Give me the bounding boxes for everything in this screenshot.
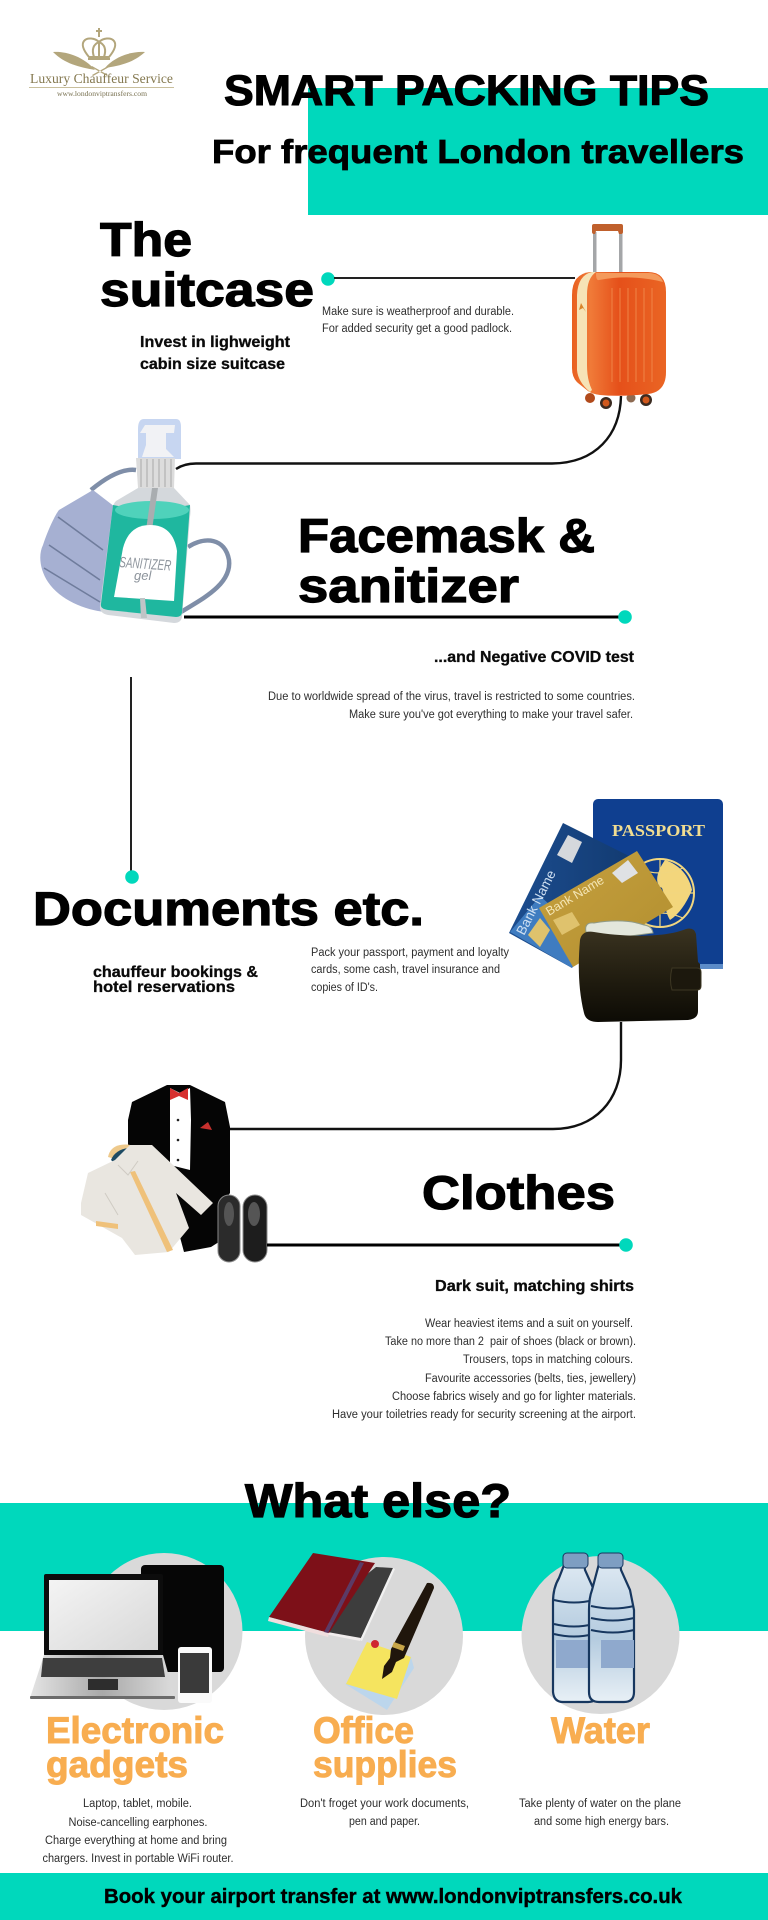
connector line and dot (184, 610, 632, 624)
suitcase subheading: cabin size suitcase (140, 356, 285, 373)
footer call to action: Book your airport transfer at www.londonviptransfers.co.uk (104, 1886, 683, 1908)
water description: Take plenty of water on the plane (519, 1798, 681, 1810)
suitcase description (322, 306, 514, 335)
suitcase subheading: Invest in lighweight (140, 334, 290, 351)
heading: Documents etc.: Documents etc. (33, 882, 424, 935)
gadgets description (42, 1798, 234, 1865)
icon: suit, shirt and shoes (81, 1085, 267, 1262)
facemask description (268, 691, 635, 721)
gadgets description: Noise-cancelling earphones. (68, 1817, 208, 1829)
clothes description (332, 1318, 636, 1421)
arrow: vertical connector to documents (125, 677, 139, 884)
heading: Electronic gadgets: Electronic (46, 1710, 224, 1751)
arrow: documents to clothes (230, 1022, 621, 1129)
arrow: suitcase to sanitizer (176, 396, 621, 469)
passport label: PASSPORT (612, 821, 706, 840)
connector dot and line (321, 272, 575, 286)
suitcase subheading (140, 334, 290, 373)
subtitle: For frequent London travellers (212, 133, 744, 170)
gadgets description: Charge everything at home and bring (45, 1835, 227, 1847)
documents subheading: chauffeur bookings & (93, 964, 258, 981)
suitcase description: Make sure is weatherproof and durable. (322, 306, 514, 318)
gadgets description: Laptop, tablet, mobile. (83, 1798, 192, 1810)
teal header block (308, 88, 768, 215)
logo: Luxury Chauffeur Service (29, 28, 174, 98)
heading: Clothes: Clothes (422, 1166, 615, 1219)
bottle label text: SANITIZER (119, 554, 172, 575)
heading: Office supplies: Office (313, 1710, 414, 1751)
gold card label: Bank Name (543, 873, 607, 919)
icon: laurel (53, 52, 145, 76)
heading: Facemask and sanitizer: Facemask & (298, 509, 595, 562)
icon: facemask and sanitizer bottle (40, 419, 229, 623)
documents description: cards, some cash, travel insurance and (311, 964, 500, 976)
clothes description: Trousers, tops in matching colours. (463, 1354, 633, 1366)
documents description: copies of ID's. (311, 982, 378, 994)
title: SMART PACKING TIPS (224, 67, 709, 115)
panel: water (519, 1553, 681, 1828)
panel: clothes (81, 1085, 636, 1421)
icon: crown (83, 28, 115, 59)
heading: Water: Water (551, 1710, 650, 1751)
connector line and dot (267, 1238, 633, 1252)
suitcase description: For added security get a good padlock. (322, 323, 512, 335)
panel: suitcase (100, 213, 666, 409)
icon: facemask and sanitizer bottle: gel (134, 568, 152, 583)
office description: pen and paper. (349, 1816, 420, 1828)
icon: suitcase (572, 224, 666, 409)
heading: The suitcase (100, 213, 314, 316)
facemask description: Make sure you've got everything to make your travel safer. (349, 709, 633, 721)
heading: Office supplies: supplies (313, 1744, 457, 1785)
water description (519, 1798, 681, 1828)
documents subheading (93, 964, 258, 996)
panel: documents (33, 799, 723, 1022)
icon: laptop, tablet and phone (30, 1553, 242, 1710)
panel: facemask and sanitizer (40, 419, 635, 721)
panel: electronic gadgets (30, 1553, 242, 1865)
water description: and some high energy bars. (534, 1816, 669, 1828)
teal band (0, 1503, 768, 1631)
icon: water bottles (522, 1553, 680, 1714)
heading: The suitcase: suitcase (100, 263, 314, 316)
documents subheading: hotel reservations (93, 979, 235, 996)
blue card label: Bank Name (513, 868, 559, 937)
documents description: Pack your passport, payment and loyalty (311, 947, 509, 959)
footer band (0, 1873, 768, 1920)
gadgets description: chargers. Invest in portable WiFi router. (42, 1853, 234, 1865)
heading: Office supplies (313, 1710, 457, 1785)
icon: passport, cards and wallet (509, 799, 723, 1022)
heading: Electronic gadgets: gadgets (46, 1744, 188, 1785)
facemask description: Due to worldwide spread of the virus, travel is restricted to some countries. (268, 691, 635, 703)
clothes description: Choose fabrics wisely and go for lighter materials. (392, 1391, 636, 1403)
heading: What else?: What else? (245, 1474, 511, 1527)
clothes description: Take no more than 2 pair of shoes (black or brown). (385, 1336, 636, 1348)
logo url: www.londonviptransfers.com (57, 90, 148, 98)
heading: Facemask and sanitizer (298, 509, 595, 612)
heading: Electronic gadgets (46, 1710, 224, 1785)
facemask subheading: ...and Negative COVID test (434, 649, 634, 666)
clothes description: Wear heaviest items and a suit on yourself. (425, 1318, 633, 1330)
office description (300, 1798, 469, 1828)
panel: office supplies (268, 1553, 469, 1828)
icon: notebooks, pen and note (268, 1553, 463, 1715)
heading: Facemask and sanitizer: sanitizer (298, 559, 519, 612)
clothes description: Favourite accessories (belts, ties, jewellery) (425, 1373, 636, 1385)
heading: The suitcase: The (100, 213, 192, 266)
clothes description: Have your toiletries ready for security screening at the airport. (332, 1409, 636, 1421)
office description: Don't froget your work documents, (300, 1798, 469, 1810)
logo name: Luxury Chauffeur Service (30, 72, 173, 87)
documents description (311, 947, 509, 994)
clothes subheading: Dark suit, matching shirts (435, 1278, 634, 1295)
